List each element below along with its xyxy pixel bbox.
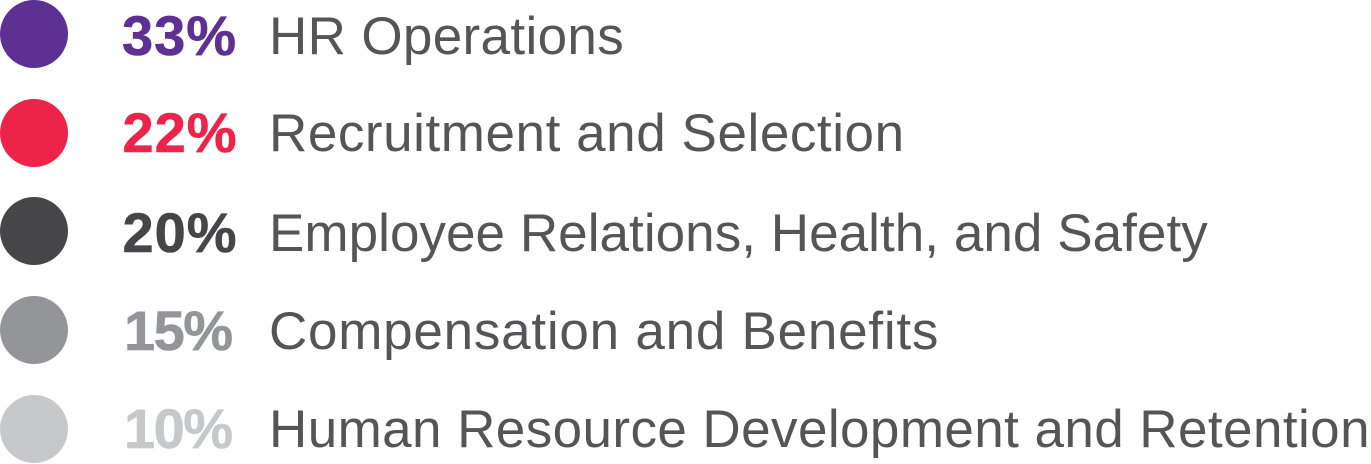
row: Recruitment and Selection — [0, 99, 905, 167]
label: HR Operations: HR Operations — [269, 7, 624, 66]
dot: mid grey — [0, 296, 68, 364]
percentage: 20%: 20% — [122, 201, 238, 264]
dot: dark grey — [0, 197, 68, 265]
label: Compensation and Benefits: Compensation and Benefits — [269, 302, 939, 361]
dot: red — [0, 99, 68, 167]
percentage: 15%: 15% — [124, 299, 232, 362]
label: Recruitment and Selection: Recruitment and Selection — [269, 104, 905, 163]
row: HR Operations — [0, 0, 624, 68]
label: Human Resource Development and Retention: Human Resource Development and Retention — [269, 400, 1370, 459]
row: Compensation and Benefits — [0, 296, 939, 364]
row: Human Resource Development and Retention — [0, 395, 1370, 463]
row: Employee Relations, Health, and Safety — [0, 197, 1208, 265]
label: Employee Relations, Health, and Safety: Employee Relations, Health, and Safety — [269, 204, 1208, 263]
percentage: 22%: 22% — [122, 101, 238, 164]
percentage: 10%: 10% — [124, 397, 232, 460]
percentage: 33%: 33% — [122, 4, 237, 66]
dot: light grey — [0, 395, 68, 463]
dot: purple — [0, 0, 68, 68]
